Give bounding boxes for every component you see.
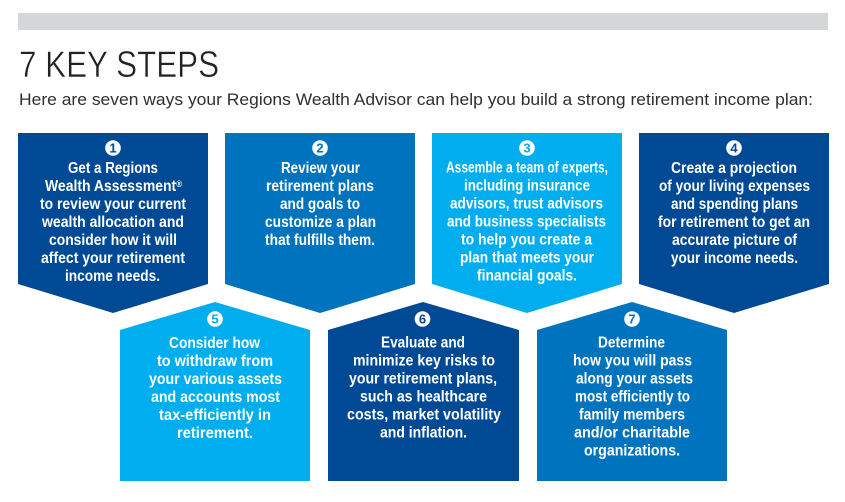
step 7 text: organizations. [584,442,680,460]
panel: step 1 [18,133,208,313]
step 3 text: plan that meets your [460,250,594,266]
panel shape [18,133,208,313]
panel shape [639,133,829,313]
step 7 text: along your assets [576,370,693,388]
step 5 text: and accounts most [151,389,281,406]
number badge 5: 5 [211,312,219,327]
step 4 text: accurate picture of [672,232,798,249]
step 5 text [149,335,282,442]
step 7 text: how you will pass [573,352,692,370]
step 7 text: and/or charitable [574,424,690,442]
panel: step 7 [537,302,727,481]
step 1 text: ® [176,179,182,189]
step 4 text: your income needs. [671,250,798,267]
step 1 text [40,160,187,285]
step 1 text: Wealth Assessment [45,178,195,195]
step 5 text: tax-efficiently in [159,407,271,424]
step 1 text: Get a Regions [68,160,158,177]
step 3 text: including insurance [464,178,590,194]
number badge 2 [312,140,328,156]
step 6 text: minimize key risks to [353,352,495,370]
step 5 text: to withdraw from [157,353,273,370]
number badge 6: 6 [419,312,426,327]
subtitle: Here are seven ways your Regions Wealth Advisor can help you build a strong retirement income plan: [19,91,813,109]
number badge 1 [105,140,121,156]
step 3 text: and business specialists [447,214,606,230]
panel shape [328,302,519,481]
step 2 text: customize a plan [265,214,376,231]
step 3 text: financial goals. [477,268,577,284]
number badge 3 [519,140,535,156]
step 5 text: your various assets [149,371,282,388]
step 1 text: consider how it will [49,232,177,249]
number badge 1: 1 [109,141,117,156]
number badge 2: 2 [316,141,324,156]
number badge 7: 7 [628,312,636,327]
step 6 text: your retirement plans, [349,370,497,388]
number badge 3: 3 [523,141,531,156]
step 2 text: retirement plans [266,178,374,195]
step 6 text: and inflation. [380,424,467,442]
step 4 text: Create a projection [671,160,797,177]
step 7 text: Determine [598,334,665,352]
step 6 text: Evaluate and [381,334,465,352]
step 7 text: family members [579,406,685,424]
step 7 text: most efficiently to [575,388,690,406]
panel shape [120,302,310,481]
step 1 text: affect your retirement [41,250,186,267]
panel: step 2 [225,133,415,313]
step 5 text: Consider how [169,335,260,352]
step 2 text: and goals to [280,196,360,213]
step 6 text: costs, market volatility [347,406,501,424]
step 3 text [446,160,608,284]
step 6 text [347,334,501,442]
step 1 text: to review your current [40,196,187,213]
step 4 text: and spending plans [671,196,798,213]
step 3 text: Assemble a team of experts, [446,160,608,176]
step 3 text: advisors, trust advisors [450,196,603,212]
step 5 text: retirement. [177,425,253,442]
number badge 5 [207,311,223,327]
panel shape [537,302,727,481]
number badge 4 [726,140,742,156]
step 3 text: to help you create a [461,232,592,248]
panel: step 4 [639,133,829,313]
step 1 text: income needs. [65,268,160,285]
number badge 4: 4 [730,141,738,156]
number badge 6 [415,311,430,327]
step 2 text: that fulfills them. [265,232,375,249]
step 7 text [573,334,693,460]
panel: step 6 [328,302,519,481]
panel: step 3 [432,133,622,313]
panel: step 5 [120,302,310,481]
step 2 text [265,160,376,249]
number badge 7 [624,311,640,327]
step 2 text: Review your [281,160,360,177]
title: 7 KEY STEPS [19,44,219,85]
step 4 text: for retirement to get an [658,214,810,231]
step 4 text: of your living expenses [659,178,810,195]
panel shape [225,133,415,313]
top gray bar [18,13,828,30]
step 1 text: wealth allocation and [41,214,184,231]
step 4 text [658,160,810,267]
step 6 text: such as healthcare [360,388,487,406]
panel shape [432,133,622,313]
